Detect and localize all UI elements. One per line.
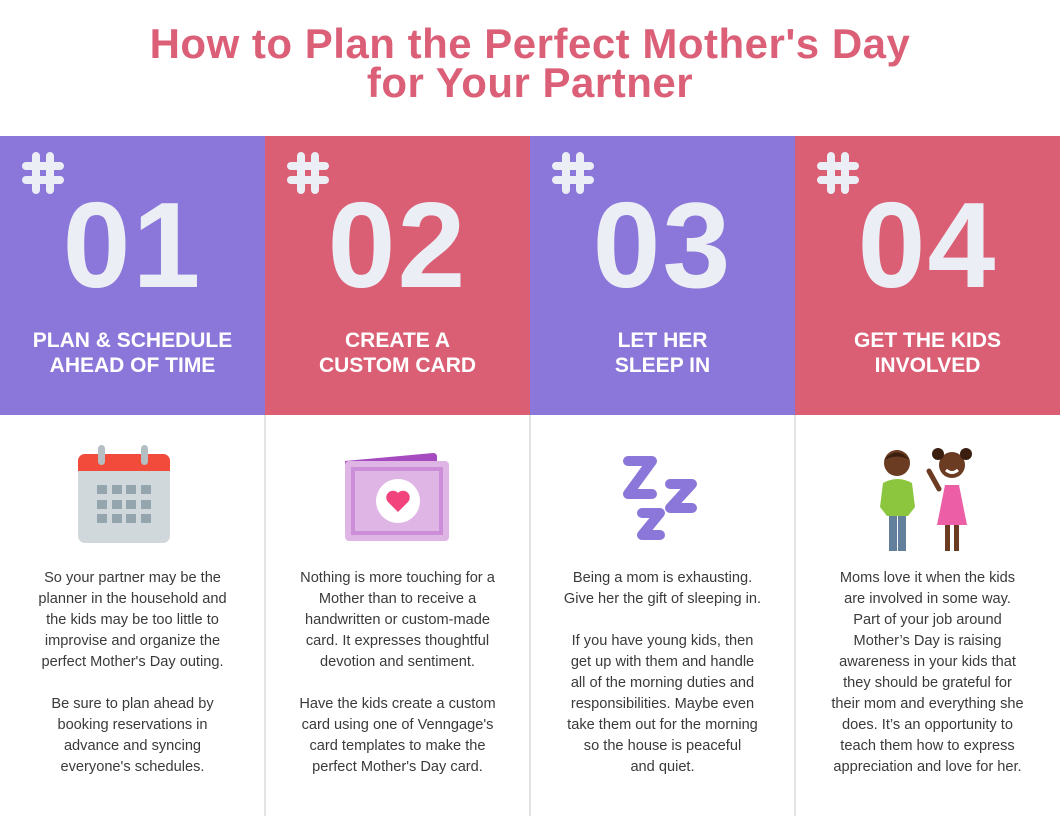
text 2: Have the kids create a custom: [299, 696, 496, 712]
title: for Your Partner: [367, 59, 693, 106]
text 4: awareness in your kids that: [839, 654, 1016, 670]
text 3: so the house is peaceful: [584, 738, 741, 754]
header 4: GET THE KIDS: [854, 329, 1001, 352]
icon: card: [345, 453, 449, 541]
text 1: So your partner may be the: [44, 570, 221, 586]
text 2: Mother than to receive a: [319, 591, 476, 607]
text 4: their mom and everything she: [831, 696, 1024, 712]
text 2: [299, 570, 496, 775]
header 4: 04: [858, 177, 997, 313]
title: How to Plan the Perfect Mother's Day: [150, 20, 910, 67]
text 2: handwritten or custom-made: [305, 612, 490, 628]
text 1: planner in the household and: [38, 591, 227, 607]
text 1: the kids may be too little to: [46, 612, 219, 628]
text 1: Be sure to plan ahead by: [51, 696, 214, 712]
header 1: AHEAD OF TIME: [50, 354, 215, 377]
text 3: take them out for the morning: [567, 717, 758, 733]
icon: zzz: [623, 456, 697, 540]
text 2: card templates to make the: [309, 738, 486, 754]
text 3: Being a mom is exhausting.: [573, 570, 752, 586]
text 1: booking reservations in: [57, 717, 208, 733]
panel: step 1: [0, 136, 265, 775]
header 2: [265, 136, 530, 415]
text 4: Part of your job around: [853, 612, 1002, 628]
text 3: all of the morning duties and: [571, 675, 754, 691]
text 2: devotion and sentiment.: [320, 654, 475, 670]
text 4: they should be grateful for: [843, 675, 1012, 691]
text 4: Moms love it when the kids: [840, 570, 1015, 586]
header 1: PLAN & SCHEDULE: [33, 329, 232, 352]
header 4: INVOLVED: [875, 354, 980, 377]
text 4: appreciation and love for her.: [833, 759, 1022, 775]
text 4: Mother’s Day is raising: [854, 633, 1001, 649]
text 2: Nothing is more touching for a: [300, 570, 495, 586]
text 2: perfect Mother's Day card.: [312, 759, 483, 775]
header 2: CUSTOM CARD: [319, 354, 476, 377]
icon: calendar: [78, 445, 170, 543]
text 3: If you have young kids, then: [572, 633, 753, 649]
header 3: LET HER: [618, 329, 707, 352]
header 3: 03: [593, 177, 732, 313]
text 3: and quiet.: [630, 759, 695, 775]
icon: kids: [880, 448, 972, 551]
header 1: 01: [63, 177, 202, 313]
text 1: everyone's schedules.: [61, 759, 204, 775]
title: [150, 20, 910, 106]
text 3: Give her the gift of sleeping in.: [564, 591, 761, 607]
text 1: [38, 570, 227, 775]
panel: step 2: [265, 136, 530, 775]
text 4: does. It’s an opportunity to: [842, 717, 1013, 733]
text 4: [831, 570, 1024, 775]
panel: step 3: [530, 136, 795, 775]
text 3: responsibilities. Maybe even: [571, 696, 754, 712]
header 3: [530, 136, 795, 415]
header 4: [795, 136, 1060, 415]
text 1: perfect Mother's Day outing.: [41, 654, 224, 670]
header 3: SLEEP IN: [615, 354, 710, 377]
text 1: improvise and organize the: [45, 633, 220, 649]
header 2: CREATE A: [345, 329, 450, 352]
text 3: [564, 570, 761, 775]
text 2: card. It expresses thoughtful: [306, 633, 489, 649]
text 1: advance and syncing: [64, 738, 201, 754]
panel: step 4: [795, 136, 1060, 775]
header 2: 02: [328, 177, 467, 313]
text 4: teach them how to express: [840, 738, 1015, 754]
text 2: card using one of Venngage's: [302, 717, 493, 733]
header 1: [0, 136, 265, 415]
text 4: are involved in some way.: [844, 591, 1011, 607]
text 3: get up with them and handle: [571, 654, 754, 670]
